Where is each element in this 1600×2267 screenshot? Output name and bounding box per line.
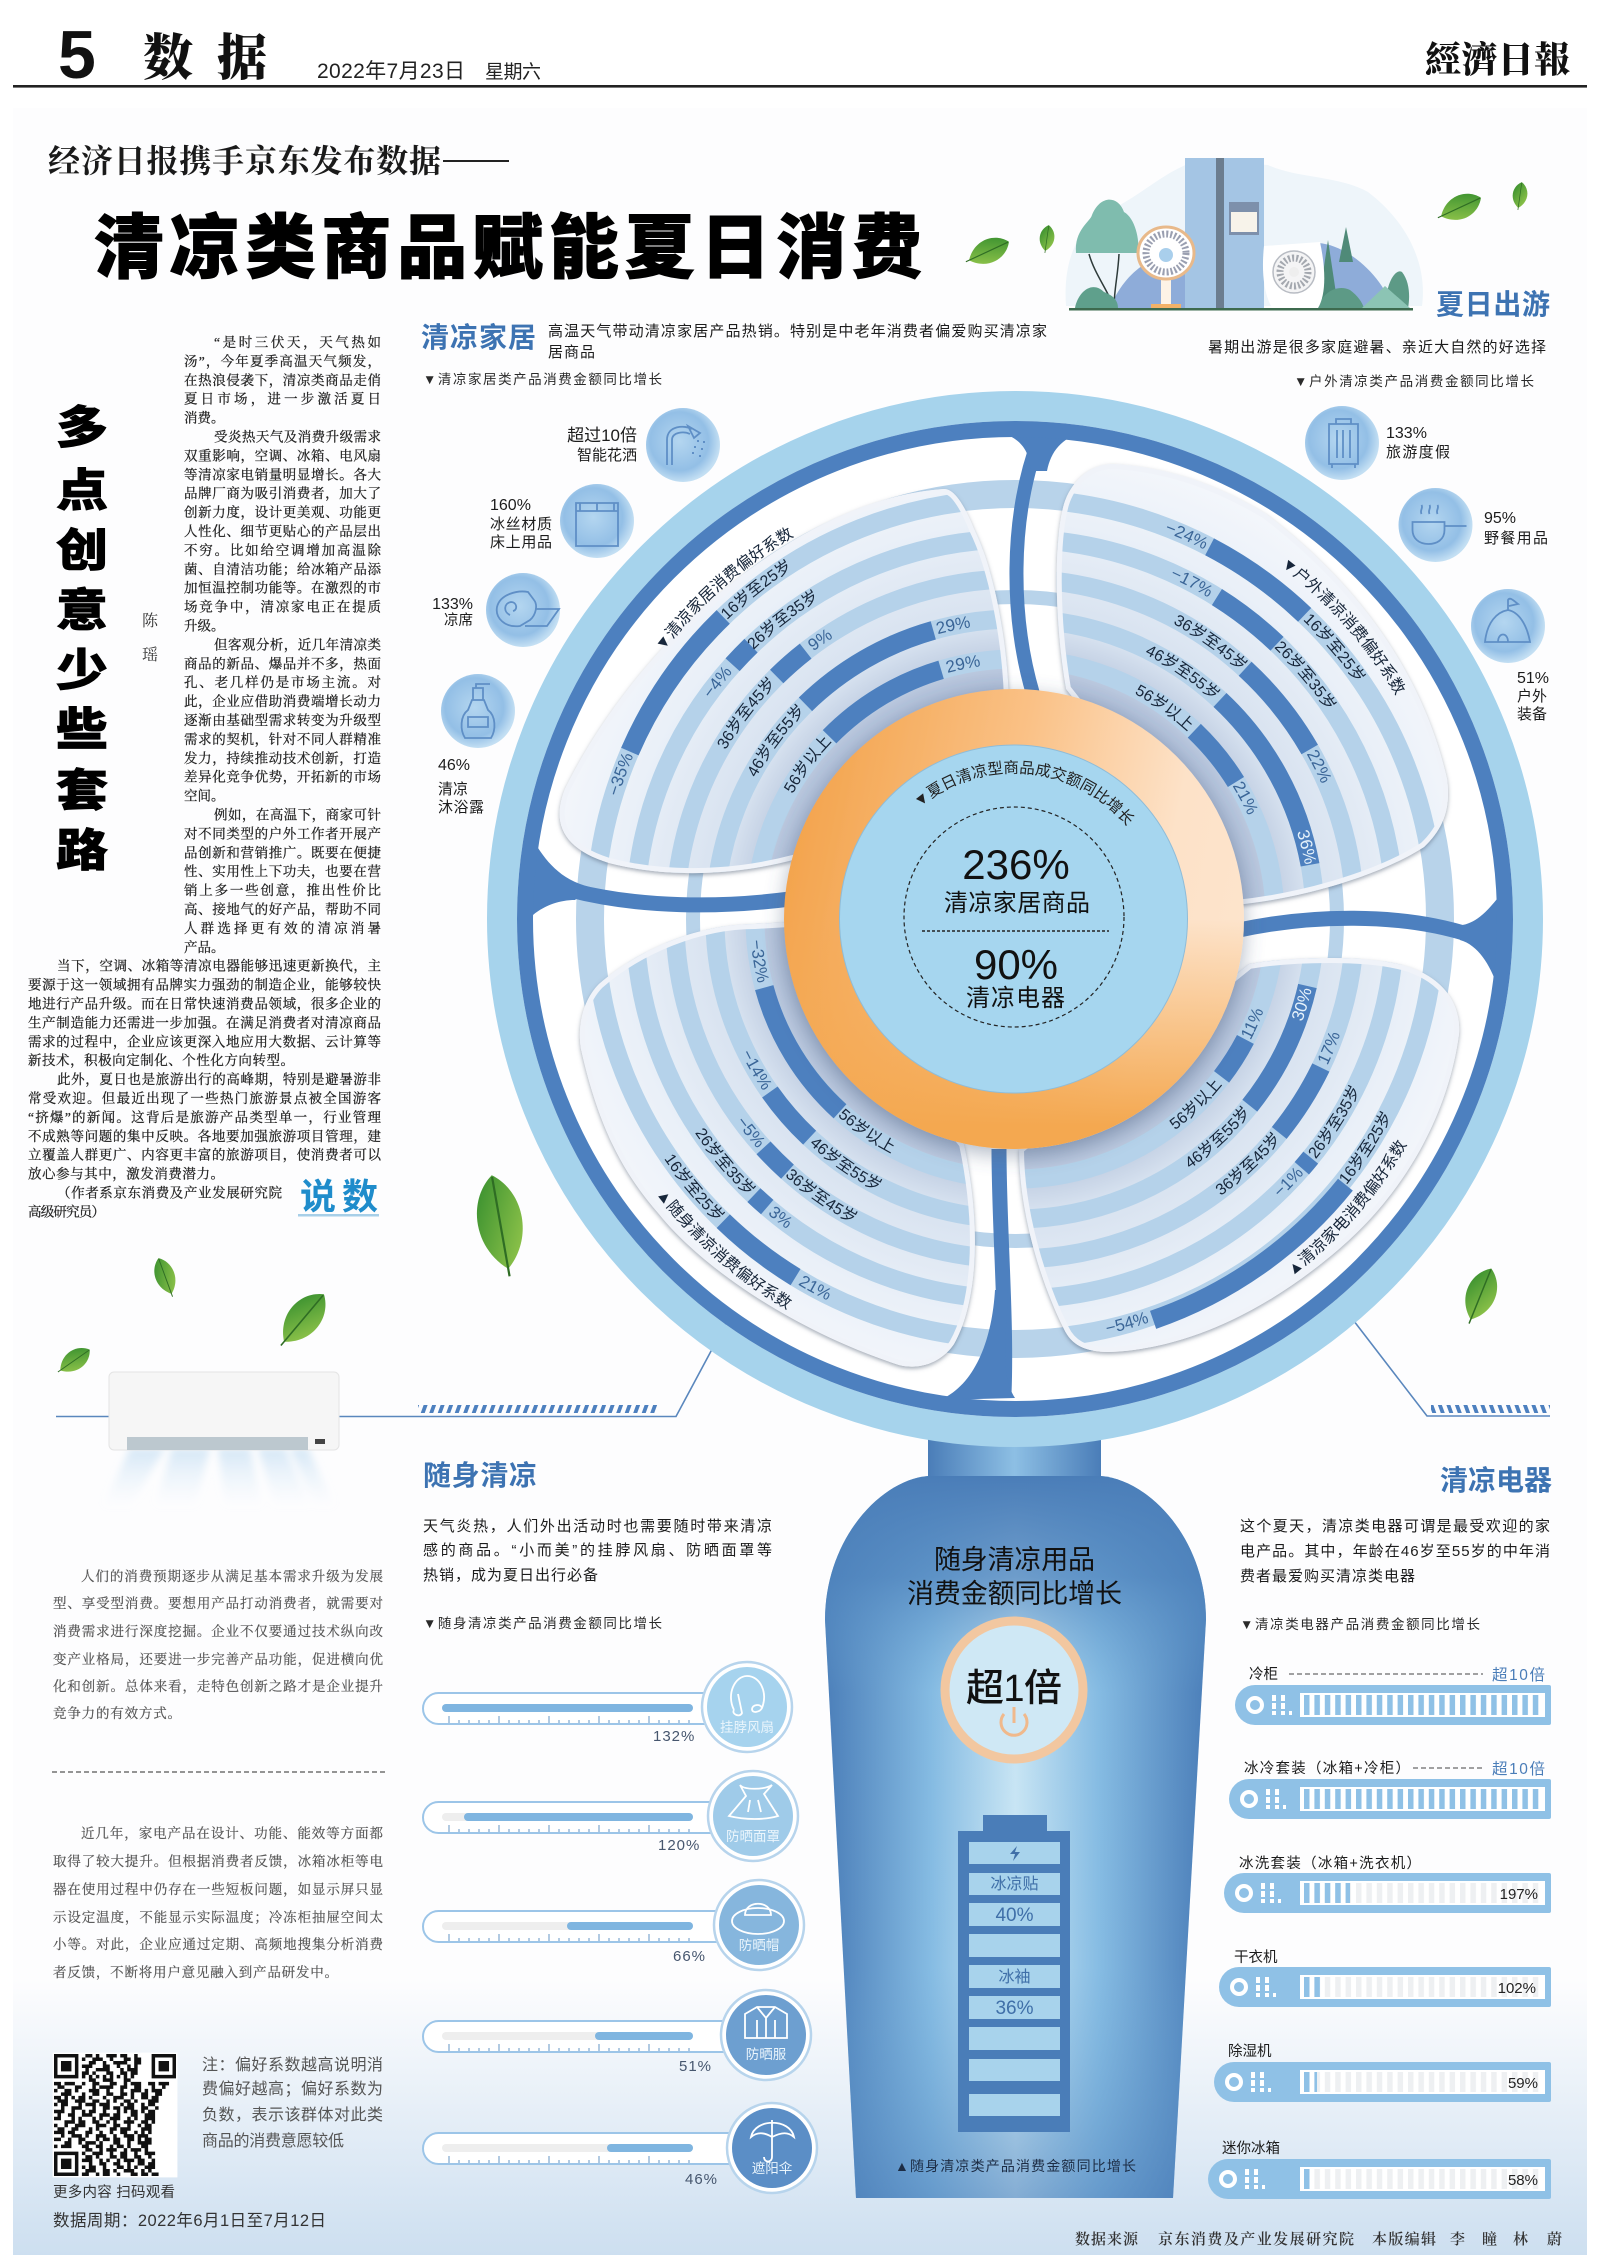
desk fan — [1138, 227, 1194, 309]
section: 清凉电器 header: 电产品。其中，年龄在46岁至55岁的中年消 — [1240, 1543, 1550, 1560]
row: 防晒帽 66%: 防晒帽 — [739, 1938, 779, 1953]
spokes — [533, 430, 1497, 1400]
icon: tent — [1471, 589, 1549, 723]
blade: 随身清凉: −5% — [740, 1118, 764, 1148]
blade: 清凉家电: 11% — [1237, 1005, 1267, 1042]
icon: picnic pot: 野餐用品 — [1484, 530, 1548, 547]
row: 遮阳伞 46%: 遮阳伞 — [752, 2160, 793, 2176]
blade: 清凉家电: 16岁至25岁 — [1336, 1108, 1396, 1188]
battery caption: ▲随身清凉类产品消费金额同比增长 — [895, 2158, 1136, 2174]
section name: 数据 — [143, 30, 267, 86]
section: 随身清凉 header: 热销，成为夏日出行必备 — [423, 1567, 598, 1584]
footer credits: 李 — [1450, 2230, 1465, 2248]
article: body text: 人群选择更有效的清凉消暑 — [184, 920, 381, 936]
section: 清凉电器 header: 这个夏天，清凉类电器可谓是最受欢迎的家 — [1240, 1518, 1550, 1535]
blade: 清凉家电: −1% — [1270, 1163, 1307, 1201]
hub — [784, 689, 1244, 1149]
article: byline — [142, 612, 159, 664]
row: 冷柜 超10倍 — [1235, 1666, 1551, 1725]
article: vertical headline: 创 — [56, 526, 108, 576]
blade: 随身清凉: 46岁至55岁 — [811, 1140, 882, 1188]
blade: 随身清凉: 56岁以上 — [839, 1108, 894, 1154]
body — [825, 1476, 1206, 2198]
blade: 清凉家居: −35% — [611, 754, 632, 794]
row: 冷柜 超10倍: 超10倍 — [1492, 1666, 1545, 1684]
article: body text: 差异化竞争优势，开拓新的市场 — [184, 769, 381, 786]
row: 防晒服 51% — [423, 1990, 811, 2080]
icon: shower gel: 46% — [438, 757, 470, 774]
blade: 随身清凉: −14% — [746, 1051, 772, 1090]
blade: 户外清凉: 16岁至25岁 — [1304, 614, 1366, 678]
icon: luggage — [1305, 406, 1450, 480]
article: body text: 此，企业应借助消费端增长动力 — [184, 693, 381, 710]
blade: 户外清凉: 21% — [1232, 782, 1258, 814]
main title: 清凉类商品赋能夏日消费 — [94, 209, 922, 287]
article: vertical headline: 意 — [56, 586, 108, 636]
illustration: summer appliances — [1066, 158, 1423, 310]
section: 清凉家居 header: 居商品 — [548, 344, 595, 361]
lower-left article block 2: 近几年，家电产品在设计、功能、能效等方面都 — [81, 1825, 384, 1842]
row: 防晒服 51%: 防晒服 — [746, 2047, 787, 2062]
masthead — [13, 17, 1587, 93]
blade: 清凉家居: 9% — [808, 630, 832, 650]
battery: 36% — [995, 1998, 1034, 2019]
row: 干衣机 102%: 干衣机 — [1234, 1949, 1278, 1966]
QR code — [53, 2053, 177, 2177]
lower-left article block 1: 竞争力的有效方式。 — [53, 1705, 181, 1721]
note: 商品的消费意愿较低 — [202, 2131, 344, 2150]
footer credits: 本版编辑 — [1372, 2230, 1436, 2248]
article: body text: 商品的新品、爆品并不多，热面 — [184, 655, 381, 672]
blade: 户外清凉: 22% — [1307, 750, 1331, 783]
leaf right of fan — [1456, 1263, 1505, 1329]
icon: smart shower: 超过10倍 — [567, 426, 637, 445]
section: 夏日出游 header: 夏日出游 — [1436, 289, 1550, 320]
icon: shower gel — [438, 674, 515, 816]
blade: 随身清凉: 36岁至45岁 — [786, 1169, 858, 1220]
article: body text: 产品。 — [184, 939, 224, 955]
right bushes — [1318, 271, 1409, 308]
article: body text: 新技术，积极向定制化、个性化方向转型。 — [28, 1052, 294, 1069]
fridge — [1185, 158, 1264, 308]
section: 随身清凉 header: 随身清凉 — [423, 1460, 537, 1491]
lower-left article block 2: 小等。对此，企业应通过定期、高频地搜集分析消费 — [53, 1936, 384, 1953]
blade: 清凉家电: 46岁至55岁 — [1182, 1103, 1254, 1172]
icon: bedding: 160% — [490, 497, 531, 514]
left tree — [1076, 200, 1138, 253]
footer credits: 数据来源 — [1075, 2230, 1139, 2248]
icon: bedding: 冰丝材质 — [490, 516, 552, 533]
row: 干衣机 102% — [1219, 1949, 1551, 2007]
blade: 清凉家居: 29% — [946, 655, 980, 673]
lower-left article block 2: 示设定温度，不能显示实际温度；冷冻柜抽屉空间太 — [53, 1909, 384, 1926]
battery — [958, 1815, 1070, 2132]
lower-left article block 1: 型、享受型消费。要想用产品打动消费者，就需要对 — [53, 1595, 383, 1612]
icon: shower gel: 沐浴露 — [438, 799, 484, 816]
orange ring — [784, 689, 1244, 1149]
lower-left article block 2 — [53, 1825, 384, 1981]
section: 夏日出游 header: ▼户外清凉类产品消费金额同比增长 — [1294, 373, 1534, 389]
blade: 清凉家居: 29% — [936, 616, 970, 634]
blade: 随身清凉 — [577, 922, 978, 1372]
icon: tent: 51% — [1517, 670, 1549, 687]
note: 注：偏好系数越高说明消 — [202, 2056, 383, 2074]
QR caption: 更多内容 扫码观看 — [53, 2184, 175, 2201]
row: 冰洗套装 197%: 197% — [1500, 1886, 1538, 1903]
icon: smart shower — [567, 408, 720, 482]
article: vertical headline: 少 — [56, 646, 108, 696]
section: 夏日出游 header — [1208, 289, 1550, 389]
row: 冷柜 超10倍: 冷柜 — [1249, 1666, 1278, 1683]
row: 挂脖风扇 132% — [423, 1662, 792, 1752]
battery: 冰袖 — [998, 1968, 1031, 1986]
blade: 户外清凉: −24% — [1167, 526, 1207, 549]
article: vertical headline: 多 — [56, 403, 108, 453]
blue hills — [1110, 243, 1392, 308]
note: 负数，表示该群体对此类 — [202, 2106, 383, 2124]
icon: tent: 装备 — [1517, 706, 1547, 723]
article: body text: 性、实用性上下功夫，也要在营 — [184, 863, 381, 880]
unit body — [109, 1372, 339, 1450]
centre disc — [840, 745, 1188, 1093]
box fan — [1263, 242, 1324, 308]
section: 随身清凉 header: 感的商品。“小而美”的挂脖风扇、防晒面罩等 — [423, 1541, 772, 1559]
blade: 清凉家居 — [557, 488, 1011, 878]
blade: 清凉家居: 26岁至35岁 — [748, 589, 814, 650]
section: 清凉电器 header: ▼清凉类电器产品消费金额同比增长 — [1240, 1617, 1480, 1632]
article: body text: 不穷。比如给空调增加高温除 — [184, 542, 382, 558]
hub arc caption: ▼夏日清凉型商品成交额同比增长 — [911, 759, 1137, 829]
article: vertical headline: 路 — [56, 826, 109, 876]
power button — [945, 1621, 1083, 1759]
blade: 清凉家电: 26岁至35岁 — [1306, 1082, 1364, 1162]
power button: 超1倍 — [966, 1668, 1062, 1710]
connector lines — [56, 1273, 1550, 1416]
lower-left article block 2: 者反馈，不断将用户意见融入到产品研发中。 — [53, 1964, 338, 1981]
article: body text: 在热浪侵袭下，清凉类商品走俏 — [184, 372, 381, 389]
lower-left article block 1: 消费需求进行深度挖掘。企业不仅要通过技术纵向改 — [53, 1623, 384, 1639]
bottle: fan base: 消费金额同比增长 — [907, 1579, 1122, 1609]
row: 冰洗套装 197% — [1224, 1855, 1551, 1913]
lower-left article block 1: 人们的消费预期逐步从满足基本需求升级为发展 — [81, 1568, 384, 1584]
weekday: 星期六 — [485, 61, 541, 83]
article: body text: 升级。 — [184, 618, 224, 634]
decorative leaves left — [52, 1171, 532, 1380]
icon: shower gel: 清凉 — [438, 781, 468, 798]
section: 清凉家居 header — [421, 322, 1047, 387]
row: 冰冷套装 超10倍: 冰冷套装（冰箱+冷柜） — [1244, 1760, 1410, 1777]
article: vertical headline: 点 — [56, 466, 108, 516]
article: body text: 加恒温控制功能等。在激烈的市 — [184, 580, 381, 596]
leaves near the title — [961, 181, 1529, 272]
blade: 随身清凉: 21% — [798, 1276, 830, 1300]
fan head — [487, 391, 1543, 1447]
data period: 数据周期：2022年6月1日至7月12日 — [53, 2211, 326, 2230]
section: 清凉电器 header: 清凉电器 — [1440, 1465, 1552, 1496]
article: body text: 地进行产品升级。而在日常快速消费品领域，很多企业的 — [28, 996, 381, 1012]
newspaper logo: 經濟日報 — [1425, 39, 1570, 80]
row: 防晒面罩 120% — [423, 1771, 798, 1861]
page number: 5 — [58, 17, 96, 93]
row: 防晒帽 66%: 66% — [673, 1948, 706, 1965]
article: body text: 常受欢迎。但最近出现了一些热门旅游景点被全国游客 — [28, 1090, 382, 1106]
blade: 随身清凉: 3% — [769, 1206, 792, 1228]
article: body text: 不成熟等问题的集中反映。各地要加强旅游项目管理，建 — [28, 1128, 382, 1145]
article: byline: 陈 — [142, 612, 159, 630]
dashed circle — [904, 807, 1124, 1027]
section: 清凉家居 header: 清凉家居 — [421, 322, 536, 353]
ground line — [1069, 308, 1413, 310]
article: body text: 需求的契机，针对不同人群精准 — [184, 731, 382, 748]
fan backing — [525, 429, 1505, 1409]
row: 除湿机 59%: 59% — [1508, 2075, 1538, 2092]
icon: cool mat — [432, 573, 560, 647]
icon: tent: 户外 — [1517, 688, 1547, 705]
hub: 清凉电器 — [966, 985, 1065, 1012]
blade: 清凉家居: 56岁以上 — [784, 737, 832, 792]
row: 防晒帽 66% — [423, 1880, 804, 1970]
section: 清凉电器 header: 费者最爱购买清凉类电器 — [1240, 1568, 1415, 1585]
article: body text: 受炎热天气及消费升级需求 — [214, 428, 381, 444]
icon: cool mat: 凉席 — [444, 612, 473, 629]
article: body text: 场竞争中，清凉家电正在提质 — [184, 599, 382, 616]
icon: smart shower: 智能花洒 — [577, 446, 637, 464]
row: 迷你冰箱 58%: 58% — [1508, 2172, 1538, 2189]
blade: 户外清凉 — [1054, 463, 1451, 909]
blade: 随身清凉: −32% — [752, 940, 769, 982]
row: 迷你冰箱 58%: 迷你冰箱 — [1222, 2140, 1280, 2157]
note — [202, 2056, 383, 2150]
article: vertical headline — [56, 403, 109, 876]
footer credits: 京东消费及产业发展研究院 — [1158, 2230, 1354, 2248]
article: body text: 品牌厂商为吸引消费者，加大了 — [184, 485, 381, 502]
row: 挂脖风扇 132%: 132% — [653, 1728, 695, 1745]
section: 清凉家居 header: 高温天气带动清凉家居产品热销。特别是中老年消费者偏爱购买清凉家 — [548, 323, 1047, 340]
vent — [127, 1437, 308, 1450]
blade: 清凉家电 — [1016, 957, 1462, 1357]
dashed divider — [922, 930, 1109, 932]
90%: 90% — [974, 941, 1058, 988]
article: vertical headline: 套 — [56, 766, 108, 816]
blade: 户外清凉: 26岁至35岁 — [1274, 642, 1337, 706]
masthead rule — [13, 85, 1587, 88]
bottle title: 随身清凉用品 — [934, 1545, 1095, 1575]
article: body text: 人性化、细节更贴心的产品层出 — [184, 523, 381, 539]
row: 挂脖风扇 132%: 挂脖风扇 — [720, 1720, 774, 1735]
article: body text: 双重影响，空调、冰箱、电风扇 — [184, 447, 381, 464]
article: body text: 例如，在高温下，商家可针 — [214, 806, 382, 824]
date: 2022年7月23日 — [317, 60, 465, 83]
article: body text: 品创新和营销推广。既要在便捷 — [184, 844, 382, 860]
article: body text: 汤”，今年夏季高温天气频发， — [184, 353, 381, 370]
lower-left article block 1 — [53, 1568, 384, 1721]
article: body text: 销上多一些创意，推出性价比 — [184, 882, 382, 899]
article: body text: 空间。 — [184, 789, 224, 804]
article: body text: 放心参与其中，激发消费潜力。 — [28, 1166, 224, 1183]
blade: 清凉家居: 16岁至25岁 — [722, 558, 788, 620]
blade: 清凉家电: 17% — [1314, 1029, 1344, 1067]
article: body text: 立覆盖人群更广、内容更丰富的旅游项目，使消费者可以 — [28, 1147, 382, 1164]
row: 防晒服 51%: 51% — [679, 2058, 712, 2075]
footer credits: 瞳 — [1482, 2230, 1497, 2248]
cloud background — [1066, 160, 1423, 306]
row: 迷你冰箱 58% — [1208, 2140, 1551, 2199]
column tag: 说数: 说数 — [300, 1176, 378, 1217]
icon: bedding: 床上用品 — [490, 534, 552, 551]
blade: 清凉家居: 36岁至45岁 — [718, 676, 771, 748]
article: body text: （作者系京东消费及产业发展研究院 — [57, 1184, 282, 1200]
footer credits: 林 — [1513, 2230, 1528, 2248]
article: body text: 但客观分析，近几年清凉类 — [214, 636, 382, 653]
lower-left article block 2: 取得了较大提升。但根据消费者反馈，冰箱冰柜等电 — [53, 1853, 384, 1870]
row: 遮阳伞 46%: 46% — [685, 2171, 718, 2188]
blade: 户外清凉: 36% — [1298, 830, 1316, 864]
blade: 清凉家居: ▼清凉家居消费偏好系数 — [658, 527, 794, 646]
article: body text: 创新力度，设计更美观、功能更 — [184, 504, 381, 521]
article: body text: 高、接地气的好产品，帮助不同 — [184, 901, 381, 918]
section: 随身清凉 header: ▼随身清凉类产品消费金额同比增长 — [423, 1616, 662, 1631]
article: body text: 消费。 — [184, 410, 224, 426]
article: vertical headline: 些 — [56, 705, 108, 755]
neck — [928, 1430, 1101, 1480]
blade: 清凉家电: 30% — [1288, 986, 1316, 1023]
blade: 户外清凉: 36岁至45岁 — [1174, 615, 1248, 666]
outer ring — [502, 406, 1528, 1432]
article: body text: 需求的过程中，企业应该更深入地应用大数据、云计算等 — [28, 1033, 381, 1050]
concentric bands — [590, 494, 1440, 1344]
blade: 清凉家电: 36岁至45岁 — [1213, 1129, 1284, 1199]
article: body text: 菌、自清洁功能；给冰箱产品添 — [184, 561, 382, 577]
row: 冰冷套装 超10倍: 超10倍 — [1492, 1760, 1545, 1778]
article: body text: 生产制造能力还需进一步加强。在满足消费者对清凉商品 — [28, 1014, 381, 1030]
section: 随身清凉 header: 天气炎热，人们外出活动时也需要随时带来清凉 — [423, 1518, 772, 1535]
article: body text: 要源于这一领域拥有品牌实力强劲的制造企业，能够较快 — [28, 977, 382, 994]
blade: 随身清凉: 26岁至35岁 — [695, 1128, 756, 1192]
hub: 清凉家居商品 — [944, 890, 1090, 917]
blade: 户外清凉: −17% — [1172, 572, 1212, 596]
blade: 清凉家居: 46岁至55岁 — [749, 704, 800, 776]
blade: 户外清凉: 46岁至55岁 — [1146, 646, 1220, 696]
icon: luggage: 旅游度假 — [1386, 444, 1450, 461]
bottle: fan base — [825, 1430, 1206, 2198]
icon: cool mat: 133% — [432, 596, 473, 613]
subtitle: 经济日报携手京东发布数据 — [48, 143, 441, 179]
row: 干衣机 102%: 102% — [1498, 1980, 1536, 1997]
article: body text: 发力，持续推动技术创新，打造 — [184, 750, 382, 767]
article: body text: 高级研究员） — [28, 1203, 105, 1219]
battery: 40% — [995, 1905, 1034, 1926]
row: 防晒面罩 120%: 120% — [658, 1837, 700, 1854]
article: body text: 对不同类型的户外工作者开展产 — [184, 825, 381, 841]
row: 除湿机 59%: 除湿机 — [1228, 2043, 1272, 2060]
blade: 随身清凉: ▲随身清凉消费偏好系数 — [658, 1194, 792, 1310]
blade: 清凉家电: ▲清凉家电消费偏好系数 — [1292, 1140, 1408, 1274]
blade: 清凉家电: 56岁以上 — [1167, 1075, 1225, 1133]
conifers — [1319, 227, 1353, 300]
row: 冰洗套装 197%: 冰洗套装（冰箱+洗衣机） — [1239, 1855, 1421, 1872]
icon: picnic pot — [1398, 488, 1548, 562]
article: body text: 孔、老几样仍是市场主流。对 — [184, 674, 381, 690]
article: body text: 此外，夏日也是旅游出行的高峰期，特别是避暑游非 — [57, 1071, 381, 1088]
row: 冰冷套装 超10倍 — [1229, 1760, 1551, 1819]
row: 遮阳伞 46% — [423, 2103, 817, 2193]
article: body text: 夏日市场，进一步激活夏日 — [184, 391, 381, 408]
article: byline: 瑶 — [142, 646, 158, 664]
article: body text: 等清凉家电销量明显增长。各大 — [184, 466, 382, 482]
icon: luggage: 133% — [1386, 425, 1427, 442]
footer credits — [1075, 2230, 1562, 2248]
icon: bedding — [490, 484, 634, 558]
blade: 户外清凉: 56岁以上 — [1136, 684, 1192, 732]
lower-left article block 1: 化和创新。总体来看，走特色创新之路才是企业提升 — [53, 1678, 383, 1695]
dashed divider — [52, 1771, 385, 1773]
article: body text — [28, 334, 382, 1219]
236%: 236% — [962, 841, 1070, 888]
blade: 户外清凉: ▼户外清凉消费偏好系数 — [1286, 560, 1406, 696]
article: body text: “是时三伏天，天气热如 — [214, 334, 381, 351]
section: 清凉电器 header — [1240, 1465, 1552, 1632]
blade: 清凉家电: −54% — [1104, 1308, 1151, 1338]
blade: 清凉家居: −4% — [706, 667, 732, 696]
cold air — [103, 1448, 335, 1507]
footer credits: 蔚 — [1547, 2230, 1562, 2248]
section: 随身清凉 header — [423, 1460, 772, 1631]
icon: picnic pot: 95% — [1484, 510, 1516, 527]
note: 费偏好越高；偏好系数为 — [202, 2080, 383, 2098]
air conditioner — [103, 1372, 339, 1507]
row: 防晒面罩 120%: 防晒面罩 — [726, 1829, 780, 1844]
article: body text: “挤爆”的新闻。这背后是旅游产品类型单一，行业管理 — [28, 1109, 382, 1126]
blade: 随身清凉: 16岁至25岁 — [664, 1154, 726, 1218]
row: 除湿机 59% — [1214, 2043, 1551, 2102]
battery: 冰凉贴 — [990, 1875, 1039, 1893]
lower-left article block 2: 器在使用过程中仍存在一些短板问题，如显示屏只显 — [53, 1881, 383, 1898]
section: 夏日出游 header: 暑期出游是很多家庭避暑、亲近大自然的好选择 — [1208, 339, 1546, 356]
section: 清凉家居 header: ▼清凉家居类产品消费金额同比增长 — [423, 371, 662, 387]
article: body text: 当下，空调、冰箱等清凉电器能够迅速更新换代，主 — [57, 958, 381, 975]
left bushes — [1075, 287, 1118, 308]
lower-left article block 1: 变产业格局，还要进一步完善产品功能，促进横向优 — [53, 1651, 384, 1668]
article: body text: 逐渐由基础型需求转变为升级型 — [184, 712, 381, 728]
